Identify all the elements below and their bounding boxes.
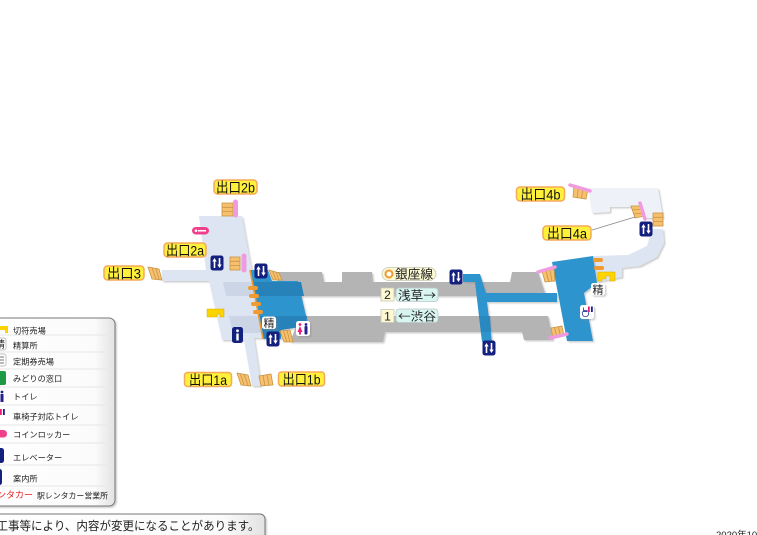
icon: elevator 5 xyxy=(482,340,496,356)
legend labels: 切符売場 xyxy=(13,326,46,336)
icon: information xyxy=(232,327,243,343)
legend labels: 精算所 xyxy=(13,340,38,350)
legend icon: commuter pass xyxy=(0,354,6,366)
line name: Ginza Line xyxy=(382,266,436,282)
direction: Asakusa: 浅草→ xyxy=(398,286,436,304)
notice box xyxy=(0,514,265,535)
icon: elevator 1 xyxy=(210,256,224,270)
east north concourse xyxy=(588,188,663,218)
notice box: 工事等により、内容が変更になることがあります。 xyxy=(0,518,260,533)
label: exit 2a: 出口2a xyxy=(166,242,204,258)
label: exit 4a: 出口4a xyxy=(547,226,587,242)
west concourse floor xyxy=(162,216,263,386)
legend labels: 車椅子対応トイレ xyxy=(13,412,79,422)
legend labels: コインロッカー xyxy=(13,430,70,440)
legend panel xyxy=(0,318,115,506)
legend icon: elevator xyxy=(0,448,4,463)
label: exit 2b: 出口2b xyxy=(216,180,255,196)
icon: accessible toilet xyxy=(580,305,594,319)
legend icon: midori window xyxy=(0,371,6,385)
label: exit 1a: 出口1a xyxy=(189,372,227,388)
legend icon: locker xyxy=(0,430,7,438)
icon: elevator 6 xyxy=(640,222,652,236)
icon: fare adjustment west: 精 xyxy=(264,317,274,330)
stairs xyxy=(148,185,663,386)
legend icon: accessible toilet xyxy=(0,407,6,422)
leader line: exit 4a xyxy=(592,217,635,230)
legend icon: info xyxy=(0,469,2,485)
platform number 1: 1 xyxy=(384,310,391,324)
east paid concourse xyxy=(552,256,597,341)
legend labels xyxy=(13,326,108,500)
gates west xyxy=(248,286,263,314)
direction: Shibuya: ←渋谷 xyxy=(398,308,436,324)
legend labels: エレベーター xyxy=(13,454,62,462)
icon: elevator 2 xyxy=(254,264,268,278)
icon: toilet xyxy=(296,321,310,336)
label: exit 3: 出口3 xyxy=(107,266,141,282)
legend icon: ticket xyxy=(0,326,8,333)
platform 2 (upper) xyxy=(270,272,545,296)
platform number 2: 2 xyxy=(384,288,391,302)
icon: elevator 3 xyxy=(266,332,280,346)
blue area bands xyxy=(254,282,307,338)
ticket machines west xyxy=(207,309,224,317)
orange gate line xyxy=(250,270,263,339)
icon: elevator 4 xyxy=(450,270,462,284)
legend labels: 駅レンタカー営業所 xyxy=(37,490,108,500)
legend labels: 案内所 xyxy=(13,474,38,484)
label: exit 4b: 出口4b xyxy=(520,186,561,202)
icon: fare adjustment east: 精 xyxy=(592,283,604,296)
legend icon: toilet xyxy=(0,389,6,404)
central blue corridor xyxy=(463,274,557,342)
platform number 1 xyxy=(381,310,394,324)
line name: Ginza Line: 銀座線 xyxy=(395,266,433,282)
label: exit 1b: 出口1b xyxy=(282,372,321,388)
west concourse platform bands xyxy=(223,282,263,333)
east concourse xyxy=(593,229,664,282)
legend labels: みどりの窓口 xyxy=(13,374,62,384)
platform number 2 xyxy=(381,288,394,302)
icon: coin locker xyxy=(192,227,209,234)
ticket machines east xyxy=(598,272,615,281)
platform 1 (lower) xyxy=(290,316,553,342)
west paid concourse xyxy=(250,270,307,339)
corridor band xyxy=(479,316,491,332)
legend labels: 定期券売場 xyxy=(13,356,54,366)
pink stair gates xyxy=(236,185,645,338)
gates east xyxy=(593,258,604,270)
legend labels: トイレ xyxy=(13,392,38,402)
